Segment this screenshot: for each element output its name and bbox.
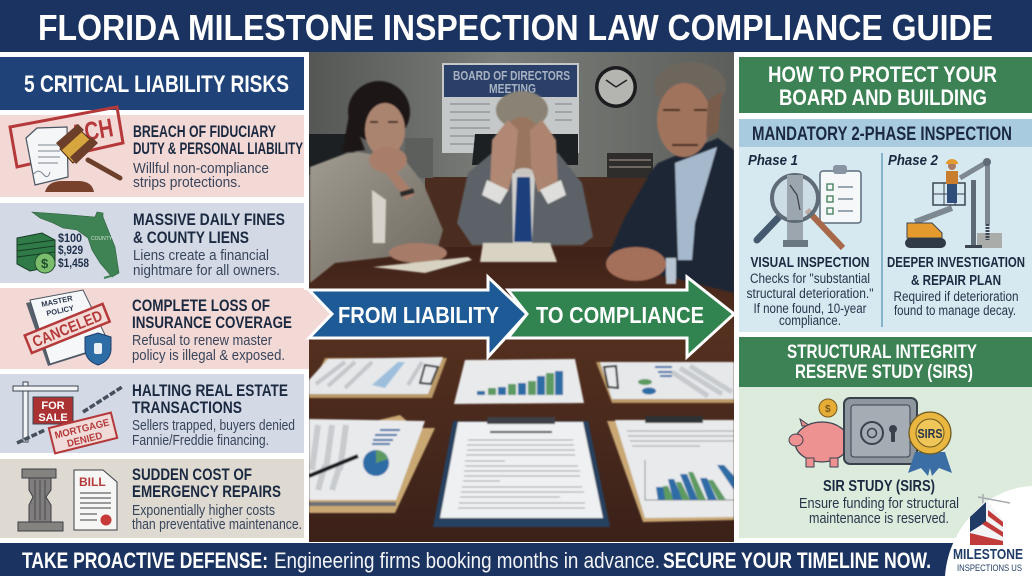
risk 5 text: Exponentially higher costs (132, 502, 275, 519)
icon: Florida map and money: COUNTY (91, 236, 113, 242)
phase 1 text: VISUAL INSPECTION (750, 254, 870, 271)
phase 1 text: Checks for "substantial (750, 271, 870, 286)
wall poster: board of directors meeting: BOARD OF DIRECTORS (453, 68, 570, 83)
left heading: 5 CRITICAL LIABILITY RISKS (24, 71, 289, 98)
document: center clipboard (433, 417, 610, 527)
risk 3 text (132, 296, 292, 364)
wall poster: board of directors meeting (442, 63, 579, 153)
risk 4 text (132, 381, 295, 449)
risk 4 text: Sellers trapped, buyers denied (132, 417, 295, 434)
icon: lift, worker and drill rig (905, 158, 1002, 248)
document: bar chart sheet (454, 359, 584, 404)
SIRS text: maintenance is reserved. (809, 511, 949, 527)
risk 1: breach of fiduciary duty (0, 107, 304, 197)
icon: breach stamp, document and gavel (10, 107, 123, 192)
bottom banner: Engineering firms booking months in advance. (274, 548, 660, 573)
risk 2 text: MASSIVE DAILY FINES (133, 210, 285, 229)
phase 1 text: structural deterioration." (746, 286, 874, 301)
phase 2 text (887, 254, 1025, 318)
risk 1 text: DUTY & PERSONAL LIABILITY (133, 139, 303, 158)
panel: structural integrity reserve study: RESERVE STUDY (SIRS) (795, 362, 973, 383)
phase 2 text: & REPAIR PLAN (911, 272, 1001, 289)
risk 5: emergency repairs (0, 459, 304, 538)
icon: magnifier over cracked column and checklist (757, 165, 861, 248)
arrow: to compliance (508, 277, 734, 357)
risk 3 text: Refusal to renew master (132, 332, 272, 349)
logo: Milestone Inspections US (945, 486, 1032, 576)
icon: breach stamp, document and gavel: ACH (68, 112, 115, 149)
risk 5 text: EMERGENCY REPAIRS (132, 482, 281, 501)
risk 5 text: SUDDEN COST OF (132, 465, 252, 484)
icon: Florida map and money: $100 (58, 233, 82, 245)
bottom banner (0, 543, 1032, 576)
risk 2 text: Liens create a financial (133, 247, 269, 264)
icon: for-sale sign, chains and mortgage denied stamp: FOR (41, 400, 65, 412)
icon: Florida map and money: $ (41, 256, 49, 271)
panel: left column liability risks (0, 57, 332, 538)
risk 5 text: than preventative maintenance. (132, 516, 302, 533)
bottom banner: TAKE PROACTIVE DEFENSE: (22, 548, 268, 573)
icon: Florida map and money: $,929 (58, 245, 83, 257)
icon: for-sale sign, chains and mortgage denied stamp: MORTGAGE (54, 417, 111, 442)
icon: cancelled master policy and shield (25, 290, 111, 366)
phase 1 text (746, 254, 874, 328)
risk 3 text: INSURANCE COVERAGE (132, 313, 292, 332)
document: top-left clipboard (309, 357, 447, 398)
office chairs (309, 134, 578, 175)
binders and tray (405, 138, 653, 178)
document: left folder with pie chart (309, 415, 435, 513)
photo: board meeting and documents (309, 52, 734, 542)
panel: structural integrity reserve study: STRUCTURAL INTEGRITY (787, 342, 977, 363)
wall poster: board of directors meeting: MEETING (489, 81, 536, 96)
icon: piggy bank, safe and SIRS badge: SIRS (918, 426, 943, 441)
icon: cancelled master policy and shield: MASTER (41, 293, 74, 309)
risk 3: loss of insurance, pink chevron reaching into the arrow (0, 288, 332, 369)
risk 2 text: & COUNTY LIENS (133, 228, 249, 247)
right heading: HOW TO PROTECT YOUR (768, 62, 997, 87)
SIRS text (799, 478, 959, 527)
risk 4 text: TRANSACTIONS (132, 398, 242, 417)
risk 2 text: nightmare for all owners. (133, 262, 280, 279)
icon: cancelled master policy and shield: POLICY (46, 303, 75, 318)
figure: stern man (605, 62, 734, 293)
panel: mandatory 2-phase inspection (739, 119, 1032, 332)
risk 2 text (133, 210, 285, 279)
risk 2: daily fines and liens (0, 203, 304, 283)
figure: worried woman (310, 81, 472, 283)
risk 1 text (133, 122, 303, 191)
arrow: from liability (309, 277, 527, 357)
icon: cracked column and bill (18, 469, 117, 531)
icon: for-sale sign, chains and mortgage denied stamp: SALE (38, 412, 68, 424)
document: top-right clipboard (596, 362, 734, 403)
panel: right column protection (739, 57, 1032, 538)
icon: for-sale sign, chains and mortgage denied stamp: DENIED (66, 431, 104, 450)
phase 1 label: Phase 1 (748, 152, 798, 169)
phase 2 label: Phase 2 (888, 152, 939, 169)
wall clock (595, 66, 637, 108)
arrow: to compliance: TO COMPLIANCE (536, 302, 704, 328)
risk 3 text: COMPLETE LOSS OF (132, 296, 270, 315)
risk 4 text: HALTING REAL ESTATE (132, 381, 288, 400)
figure: head-in-hands man (457, 91, 593, 262)
document: right clipboard with bars (607, 416, 734, 522)
arrow: from liability: FROM LIABILITY (338, 302, 499, 328)
icon: cracked column and bill: BILL (79, 475, 106, 489)
risk 4: halting transactions (0, 374, 304, 453)
phase 1 text: If none found, 10-year (754, 301, 867, 316)
icon: for-sale sign, chains and mortgage denied stamp (13, 382, 122, 453)
icon: piggy bank, safe and SIRS badge: $ (825, 404, 831, 415)
risk 1 text: Willful non-compliance (133, 160, 269, 177)
risk 5 text (132, 465, 302, 533)
icon: Florida map and money (17, 212, 119, 278)
left heading (0, 57, 304, 110)
header bar (0, 0, 1032, 52)
SIRS text: Ensure funding for structural (799, 496, 959, 512)
risk 1 text: BREACH OF FIDUCIARY (133, 122, 276, 141)
phase 1 text: compliance. (779, 313, 841, 328)
panel: structural integrity reserve study (739, 337, 1032, 538)
credenza behind the table (425, 177, 650, 247)
right heading (739, 57, 1032, 113)
risk 4 text: Fannie/Freddie financing. (132, 432, 269, 449)
icon: cancelled master policy and shield: CANCELED (30, 308, 105, 351)
risk 3 text: policy is illegal & exposed. (132, 347, 285, 364)
risk 1 text: strips protections. (133, 174, 241, 191)
right heading: BOARD AND BUILDING (779, 85, 987, 110)
SIRS text: SIR STUDY (SIRS) (823, 478, 935, 495)
icon: Florida map and money: $1,458 (58, 258, 90, 270)
icon: piggy bank, safe and SIRS badge (789, 398, 952, 476)
bottom banner: SECURE YOUR TIMELINE NOW. (663, 548, 931, 573)
